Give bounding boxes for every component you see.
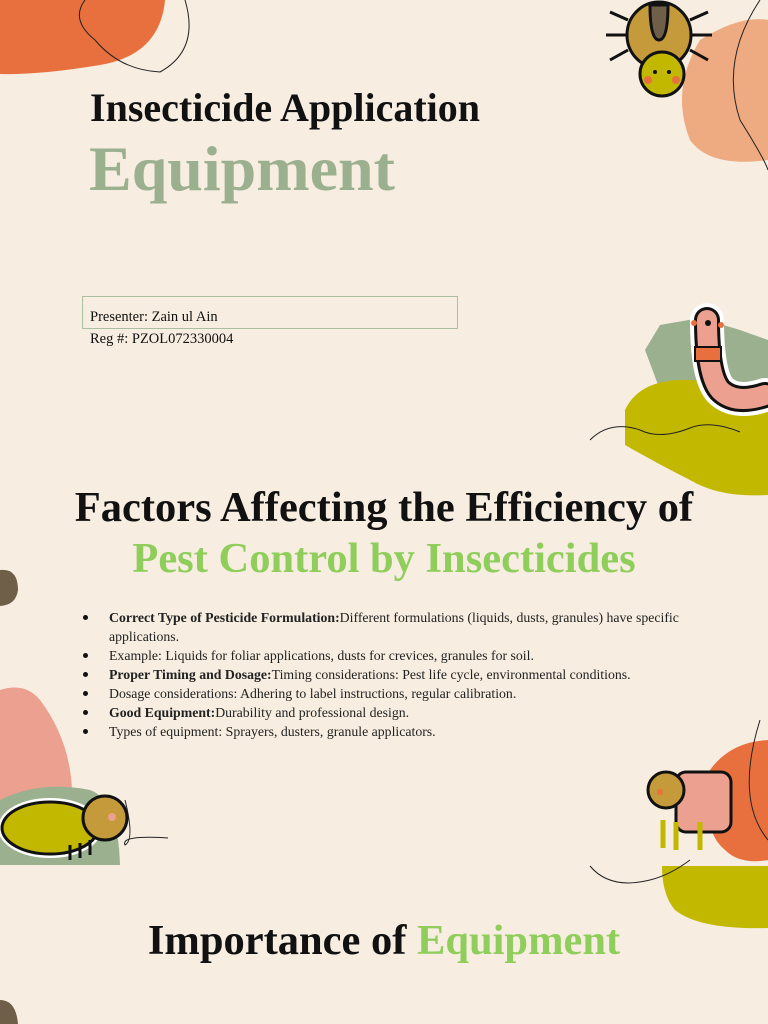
presenter text: Presenter: Zain ul Ain xyxy=(90,309,218,325)
bullet list: Dosage considerations: Adhering to label instructions, regular calibration. xyxy=(109,686,516,701)
heading: importance: Importance of Equipment xyxy=(148,917,620,964)
heading: factors: Pest Control by Insecticides xyxy=(132,535,636,582)
bullet list xyxy=(83,610,679,739)
icon: bee xyxy=(646,770,732,850)
icon: spider xyxy=(606,0,712,98)
heading: factors: Factors Affecting the Efficiency of xyxy=(75,484,693,531)
bullet list: Correct Type of Pesticide Formulation:Different formulations (liquids, dusts, granules) have specific applications. xyxy=(109,610,679,644)
bullet list: Example: Liquids for foliar applications, dusts for crevices, granules for soil. xyxy=(109,648,534,663)
heading: factors xyxy=(75,484,694,582)
bullet list: Types of equipment: Sprayers, dusters, granule applicators. xyxy=(109,724,436,739)
presenter text xyxy=(90,309,234,347)
presenter text: Reg #: PZOL072330004 xyxy=(90,331,233,347)
title: Insecticide Application xyxy=(90,85,480,130)
icon: worm xyxy=(690,303,768,416)
icon: beetle larva xyxy=(0,794,128,860)
bullet list: Proper Timing and Dosage:Timing considerations: Pest life cycle, environmental conditions. xyxy=(109,667,631,682)
presenter box xyxy=(82,296,458,329)
bullet list: Good Equipment:Durability and professional design. xyxy=(109,705,409,720)
subtitle: Equipment: Equipment xyxy=(89,133,395,204)
